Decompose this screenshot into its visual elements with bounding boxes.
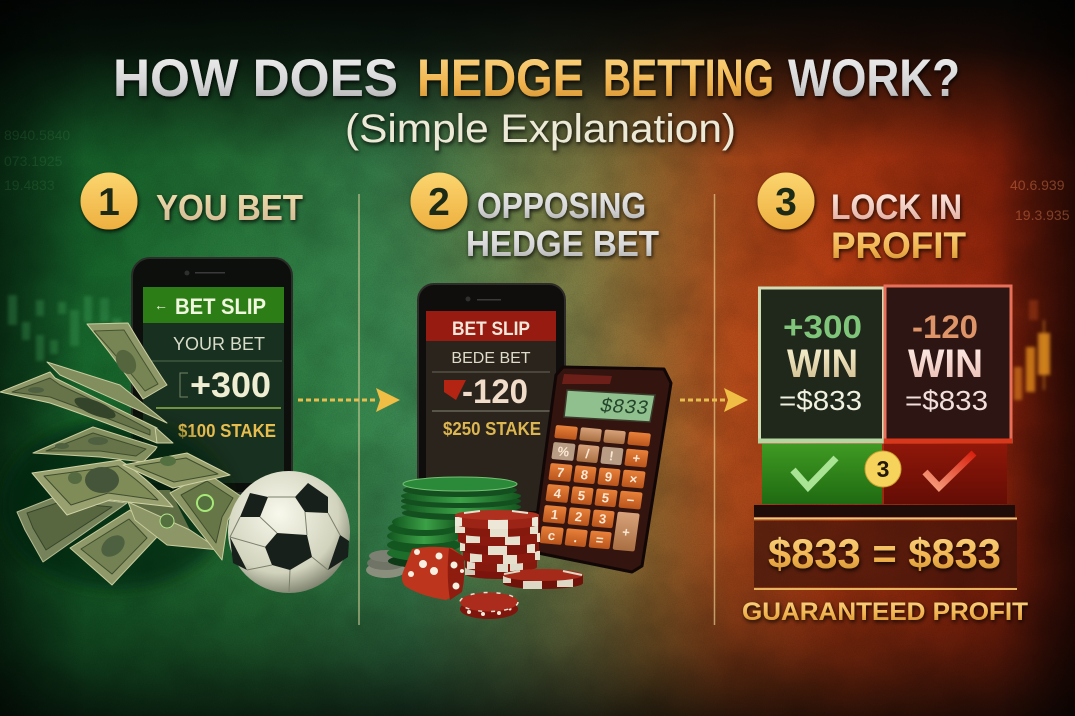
step 2 heading: OPPOSING xyxy=(477,185,646,226)
icon: green chip stack xyxy=(366,477,521,578)
background ticker numbers right xyxy=(1010,177,1070,223)
outcome: -120 wins: =$833 xyxy=(905,385,988,416)
step 3 heading: LOCK IN xyxy=(831,188,962,227)
calculator keys: 5 xyxy=(601,490,610,506)
icon: pile of money xyxy=(0,323,242,590)
calculator keys xyxy=(539,425,651,552)
step 2 heading: 2 xyxy=(428,181,450,224)
background ticker numbers left: 073.1925 xyxy=(4,153,63,169)
stake: $100: $100 STAKE xyxy=(178,421,276,441)
calculator keys: / xyxy=(585,446,591,461)
background chart: orange candles xyxy=(1014,300,1050,400)
calculator keys: 3 xyxy=(598,511,607,527)
outcome: -120 wins: -120 xyxy=(912,309,978,345)
panel: equal payout xyxy=(754,505,1017,589)
title: BETTING xyxy=(603,49,774,108)
icon: small red chip xyxy=(460,592,518,619)
bracket mark xyxy=(180,373,188,397)
odds: -120: -120 xyxy=(462,373,528,411)
title xyxy=(113,49,960,108)
arrow: step 2 to step 3 xyxy=(680,388,748,412)
header: bet slip: ← xyxy=(154,297,168,313)
background ticker numbers left: 19.4833 xyxy=(4,177,55,193)
icon: flat red chip xyxy=(503,569,583,589)
background chart: green candles xyxy=(8,295,121,361)
step 1 heading: YOU BET xyxy=(156,187,303,228)
step 2 heading xyxy=(410,172,659,264)
calculator keys: ! xyxy=(608,448,615,463)
panel: phone 2 hedge slip xyxy=(418,284,565,524)
badge: 3: 3 xyxy=(877,456,889,482)
outcome: -120 wins xyxy=(884,286,1012,442)
panel: outcome comparison xyxy=(758,286,1012,504)
calculator keys: + xyxy=(632,450,642,466)
panel: phone 1 bet slip xyxy=(132,258,292,493)
header: bet slip: BET SLIP xyxy=(175,294,266,319)
panel: equal payout: $833 = $833 xyxy=(768,530,1001,577)
step 3 heading: 3 xyxy=(775,181,797,224)
background ticker numbers right: 40.6.939 xyxy=(1010,177,1065,193)
icon: soccer ball xyxy=(228,471,350,593)
title: WORK? xyxy=(788,49,960,108)
step 3 heading xyxy=(758,172,966,266)
calculator keys: 5 xyxy=(577,488,586,503)
calculator keys: 7 xyxy=(556,465,565,480)
label: hedge bet: BEDE BET xyxy=(451,350,531,367)
background ticker numbers right: 19.3.935 xyxy=(1015,207,1070,223)
label: your bet: YOUR BET xyxy=(173,334,265,354)
outcome: +300 wins xyxy=(758,288,884,442)
green check bar xyxy=(762,444,882,504)
step 2 heading: HEDGE BET xyxy=(466,223,659,264)
icon: red shield xyxy=(444,380,466,400)
step 1 heading xyxy=(80,172,303,230)
calculator display xyxy=(564,390,655,422)
background ticker numbers left: 8940.5840 xyxy=(4,127,70,143)
header: bet slip xyxy=(143,287,284,323)
odds: +300: +300 xyxy=(190,366,271,405)
arrow: step 1 to step 2 xyxy=(298,388,400,412)
badge: 3 xyxy=(865,451,901,487)
calculator keys: = xyxy=(595,532,605,548)
icon: red chip stack xyxy=(455,510,540,579)
outcome: +300 wins: +300 xyxy=(783,309,862,345)
title: HEDGE xyxy=(417,49,584,108)
calculator keys: 2 xyxy=(574,509,583,524)
header: bet slip: BET SLIP xyxy=(452,319,530,340)
icon: calculator xyxy=(533,367,671,572)
outcome: +300 wins: WIN xyxy=(787,342,858,386)
calculator keys: 9 xyxy=(604,469,613,485)
caption: guaranteed profit: GUARANTEED PROFIT xyxy=(742,598,1028,626)
header: bet slip xyxy=(426,311,556,341)
calculator keys: 1 xyxy=(550,507,559,522)
outcome: -120 wins: WIN xyxy=(908,342,983,386)
calculator display: $833 xyxy=(600,396,649,421)
step 1 heading: 1 xyxy=(98,181,120,224)
title: HOW DOES xyxy=(113,49,398,108)
step 3 heading: PROFIT xyxy=(831,225,966,266)
icon: red die xyxy=(402,547,464,600)
calculator keys: c xyxy=(547,528,556,543)
subtitle: (Simple Explanation) xyxy=(345,107,736,151)
calculator keys: − xyxy=(626,492,636,508)
red check bar xyxy=(884,444,1007,504)
calculator keys: × xyxy=(629,471,639,487)
calculator keys: 4 xyxy=(553,486,563,501)
calculator keys: + xyxy=(621,524,631,540)
calculator keys: 8 xyxy=(580,467,589,482)
calculator keys: . xyxy=(573,530,579,545)
calculator keys: % xyxy=(557,444,571,460)
background ticker numbers left xyxy=(4,127,70,193)
outcome: +300 wins: =$833 xyxy=(779,385,862,416)
stake: $250: $250 STAKE xyxy=(443,419,541,439)
